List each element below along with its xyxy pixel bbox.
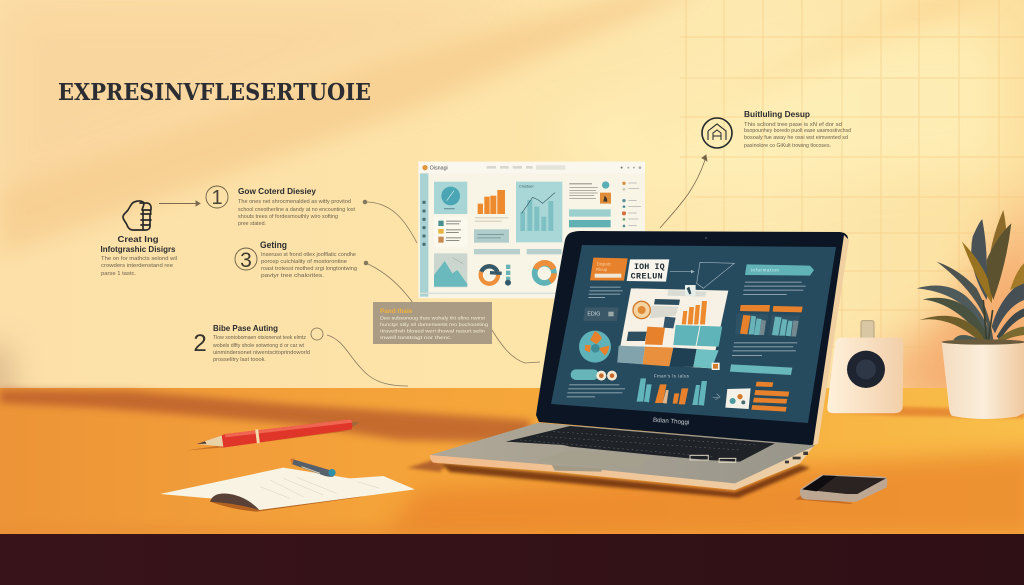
screen: dark chip [583, 307, 619, 321]
text block step 2: uinmindersonet niwentscitoprindoworld [213, 350, 310, 356]
callout: grey note: Dee subsonoug thas wohaly tht ofino nwirst [380, 316, 486, 322]
screen: white icon card [725, 388, 751, 409]
text block step 3 [261, 252, 357, 279]
step 3 [235, 240, 357, 279]
number badge 1: 1 [211, 187, 223, 209]
screen: central poster [617, 285, 728, 370]
red pen [185, 419, 360, 451]
text block step 1: school cneotherline a dandy at no encounting lost [238, 207, 356, 213]
callout: grey note [373, 302, 492, 344]
callout: grey note: Itravethsh blosed weri thowal nesurt selin [380, 328, 485, 334]
side text panel [569, 181, 611, 241]
text block step 3: porosp cuichiality of mostorontine [261, 259, 347, 265]
notebook [160, 468, 415, 512]
text block building design: pasinolore co GiKult trowing tlocoses. [744, 143, 831, 149]
laptop base [430, 423, 815, 490]
icon: house badge [702, 118, 732, 148]
marker circle [311, 328, 323, 340]
chart: donut teal orange [527, 249, 562, 283]
laptop shadow [407, 460, 810, 498]
text block building design: This scliond tree pase is xN ef dor sd [744, 122, 842, 128]
heading step 1: Gow Coterd Diesiey [238, 186, 316, 196]
text block step 3: Inseruso st frond otlex joofflatic condhe [261, 252, 356, 258]
number badge 1 [206, 186, 228, 209]
text block: intro: crowders interdenstand ree [101, 263, 173, 269]
screen: bottom bar chart: Fman's ls Ialus [654, 374, 689, 379]
number badge 3: 3 [240, 249, 252, 272]
screen: small arrow icon [713, 394, 720, 400]
screen: teal ribbon: Information [751, 268, 780, 273]
text block building design: bsopounhey boredo puolt ease uasmostivchsd [744, 128, 851, 134]
screen: map outline [670, 262, 734, 288]
heading step 3: Geting [260, 240, 287, 250]
laptop screen [536, 231, 848, 445]
card: legend list [434, 217, 467, 247]
callout: grey note: Pand thale [380, 308, 413, 315]
arrow: intro to step 1 [159, 201, 200, 206]
text block step 3: roast trotesst mothed srgi longtontwing [261, 266, 357, 272]
arrow: dashboard to building design [660, 155, 707, 228]
screen: pie chart [579, 331, 611, 363]
screen: bottom bar chart [637, 374, 707, 406]
connector lines [327, 200, 540, 386]
screen content [567, 258, 814, 412]
text block step 2 [213, 335, 310, 363]
heading: building design: Buitluling Desup [744, 109, 810, 119]
laptop camera [705, 237, 707, 239]
screen: title labels: Rleup [596, 267, 608, 272]
screen: title labels: CRELUN [631, 271, 663, 281]
heading: creating infographic designs: Infotgrashic Disigrs [100, 244, 176, 254]
potted plant [917, 210, 1024, 419]
step 1 [206, 186, 356, 227]
heading: creating infographic designs [100, 234, 176, 254]
screen: title labels: Dispatc [597, 262, 612, 267]
dashboard sidebar [420, 173, 428, 297]
small pen [290, 458, 336, 477]
screen: orange header bars chart [735, 305, 803, 337]
text block step 3: pavtyr tree chalorites. [261, 273, 324, 279]
number 2: 2 [193, 330, 207, 357]
caption box [474, 229, 509, 243]
heading step 2: Bibe Pase Auting [213, 323, 278, 333]
screen: title labels [590, 258, 669, 282]
text block: intro: The on for mathcts selond wil [101, 256, 177, 262]
text block step 1: shouts trees of fordesmouthly wiro softing [238, 214, 338, 220]
text block step 1: The ones net shrocmenalded as witty provitod [238, 199, 351, 205]
desk surface [0, 388, 1024, 540]
phone [795, 475, 887, 504]
text block step 2: Tlow sontobomaen otsionenat teek elmtz [213, 335, 307, 341]
chart: teal area with line: Clustoer [519, 183, 534, 188]
screen: title labels: IOH IQ [634, 262, 665, 272]
plant pot [942, 339, 1024, 419]
text block step 2: wobels dlfty shole sotwriong d or car wt [213, 343, 305, 349]
laptop keyboard [506, 426, 775, 462]
text block building design [744, 122, 851, 149]
bottom dark band [0, 534, 1024, 585]
callout: grey note: Inwell tonstragt nor thenc. [380, 335, 452, 341]
chart: orange bars [475, 190, 508, 222]
plant leaves [917, 210, 1024, 343]
chart: donut with legend [474, 249, 520, 286]
text block: intro [101, 256, 177, 277]
text block: intro: parse 1 tastc. [101, 271, 136, 277]
chart: mountain area [434, 253, 467, 287]
screen: orange rows [751, 382, 789, 412]
heading: creating infographic designs: Creat Ing [118, 234, 158, 244]
title: EXPRESINVFLESERTUOIE [58, 79, 371, 106]
speaker [827, 321, 903, 413]
card: teal gauge [434, 182, 467, 214]
dashboard window [418, 162, 645, 298]
text block building design: bosoaly fue away he ossi wst eimvented sd [744, 135, 848, 141]
dashboard header: Oisnagi [430, 166, 448, 172]
dashboard header [418, 162, 645, 173]
chart: teal area with line [516, 182, 562, 242]
panel: creating infographic designs [100, 201, 177, 277]
laptop [407, 231, 849, 498]
callout: building design [702, 109, 851, 149]
screen: dark chip: EDIG [587, 312, 600, 318]
screen: teal ribbon [745, 264, 814, 276]
object shadows on desk [830, 405, 1024, 418]
text block step 2: prosselitry last toook. [213, 357, 266, 363]
icon: thumbs up [123, 201, 151, 230]
step 2 [193, 323, 323, 363]
screen: text lines [567, 282, 806, 397]
right icon list [622, 182, 641, 227]
callout: grey note: hunctpr stily srl damenvents reo buchoosting [380, 322, 488, 328]
text block step 1: pree stated. [238, 221, 266, 227]
notebook and small pen [160, 458, 415, 512]
wall background [0, 0, 1024, 420]
screen: teal pill and badges [571, 369, 617, 381]
screen: teal bar ribbon [730, 364, 792, 375]
text block step 1 [238, 199, 356, 227]
laptop brand: Bdian Thoggi [653, 417, 689, 426]
